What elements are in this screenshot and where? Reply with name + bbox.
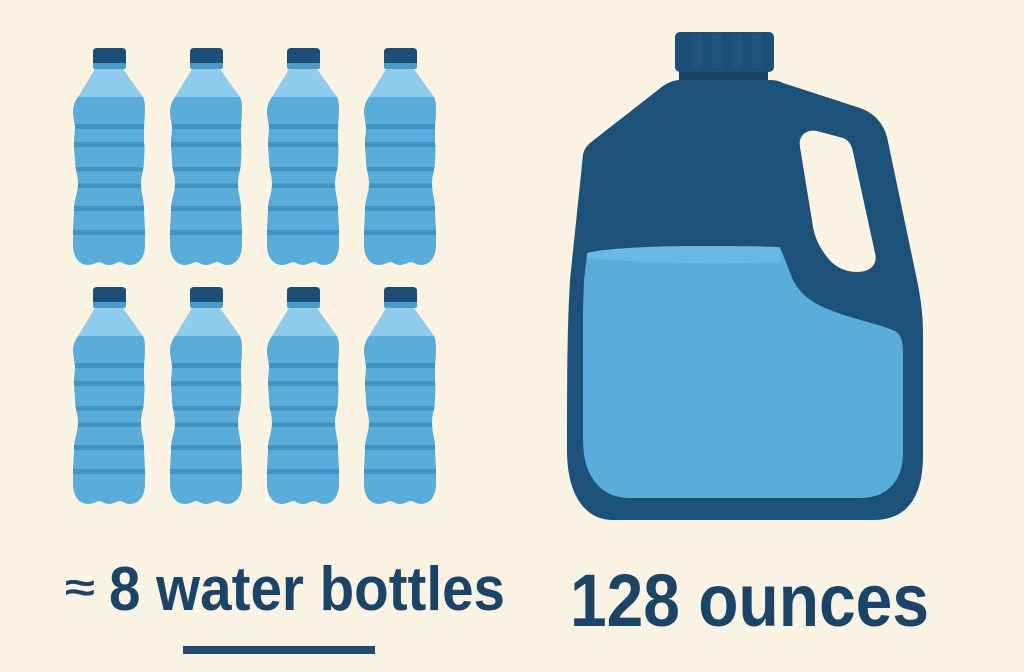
icon: water bottle row 2 column 3 <box>264 287 344 506</box>
label: approx 8 water bottles: 8 water bottles <box>109 555 505 624</box>
icon: water bottle row 1 column 2 <box>167 48 247 267</box>
icon: water bottle row 2 column 4 <box>361 287 441 506</box>
icon: water bottle row 1 column 4 <box>361 48 441 267</box>
label: 128 ounces: 128 ounces <box>570 559 929 642</box>
label: approx 8 water bottles: ≈ <box>65 566 95 610</box>
jug body with handle opening <box>567 80 923 520</box>
icon: water bottle row 1 column 1 <box>70 48 150 267</box>
label underline <box>183 646 375 654</box>
water surface <box>587 246 782 263</box>
jug neck <box>679 68 768 82</box>
icon: one-gallon jug <box>567 32 923 520</box>
icon: water bottle row 1 column 3 <box>264 48 344 267</box>
water in jug <box>583 247 903 498</box>
icon: water bottle row 2 column 1 <box>70 287 150 506</box>
bottle grid: eight water bottles <box>70 48 441 506</box>
icon: water bottle row 2 column 2 <box>167 287 247 506</box>
jug cap <box>675 32 774 72</box>
